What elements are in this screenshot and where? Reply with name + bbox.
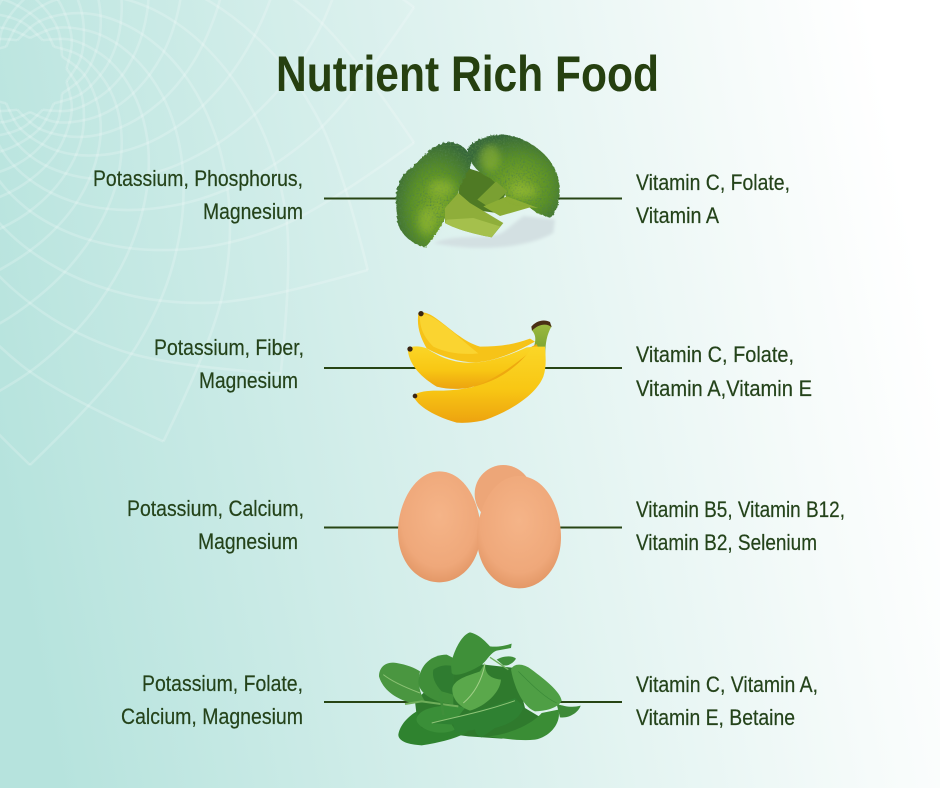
background mandala pattern (0, 0, 445, 494)
right text: spinach vitamins: Vitamin E, Betaine (636, 705, 795, 730)
right text: banana vitamins (636, 342, 812, 401)
left text: broccoli minerals (93, 166, 303, 224)
left text: banana minerals: Potassium, Fiber, (154, 335, 304, 360)
left text: banana minerals (154, 335, 304, 393)
row: banana (154, 311, 812, 423)
right text: egg vitamins: Vitamin B2, Selenium (636, 530, 817, 555)
right text: banana vitamins: Vitamin A,Vitamin E (636, 376, 812, 401)
row: broccoli (93, 135, 790, 248)
connector lines: broccoli (324, 198, 622, 200)
right text: spinach vitamins: Vitamin C, Vitamin A, (636, 672, 818, 697)
icon: broccoli (396, 135, 560, 248)
connector lines: eggs (324, 526, 622, 528)
left text: egg minerals: Potassium, Calcium, (127, 496, 304, 521)
right text: banana vitamins: Vitamin C, Folate, (636, 342, 794, 367)
banana tips (407, 311, 424, 398)
left text: spinach minerals: Potassium, Folate, (142, 671, 303, 696)
right text: egg vitamins: Vitamin B5, Vitamin B12, (636, 497, 845, 522)
connector lines: spinach (324, 701, 622, 703)
left text: egg minerals: Magnesium (198, 529, 298, 554)
left text: spinach minerals: Calcium, Magnesium (121, 704, 303, 729)
right text: broccoli vitamins: Vitamin C, Folate, (636, 170, 790, 195)
broccoli highlights (418, 145, 537, 235)
title: Nutrient Rich Food (276, 46, 659, 102)
left text: egg minerals (127, 496, 304, 554)
right text: broccoli vitamins (636, 170, 790, 228)
left text: broccoli minerals: Magnesium (203, 199, 303, 224)
icon: bananas (407, 311, 552, 423)
left text: banana minerals: Magnesium (199, 368, 298, 393)
right text: egg vitamins (636, 497, 845, 555)
broccoli stems (445, 178, 538, 237)
right text: spinach vitamins (636, 672, 818, 730)
left text: broccoli minerals: Potassium, Phosphorus, (93, 166, 303, 191)
icon: spinach (379, 632, 581, 745)
connector lines: banana (324, 367, 622, 369)
icon: eggs (398, 465, 561, 588)
left text: spinach minerals (121, 671, 303, 729)
row: spinach (121, 632, 818, 745)
right text: broccoli vitamins: Vitamin A (636, 203, 719, 228)
row: eggs (127, 465, 845, 588)
